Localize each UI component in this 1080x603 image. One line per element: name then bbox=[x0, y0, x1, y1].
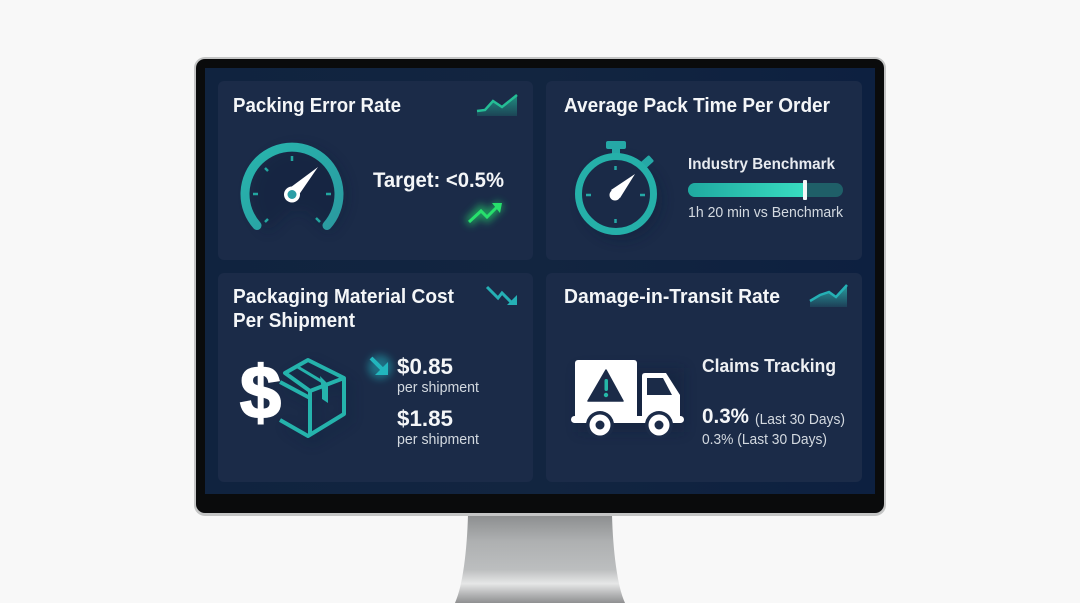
heading: packaging material cost: Packaging Material Cost bbox=[233, 286, 454, 308]
text: claims tracking: Claims Tracking bbox=[702, 355, 836, 376]
panel: packaging material cost: per shipment bbox=[397, 431, 480, 448]
monitor stand bbox=[455, 515, 625, 603]
gauge needle bbox=[284, 167, 318, 202]
panel: packaging material cost bbox=[218, 273, 533, 482]
icon: delivery truck with warning bbox=[571, 360, 684, 439]
package box bbox=[280, 360, 344, 436]
text: price one: $0.85 bbox=[397, 354, 453, 379]
heading: damage in transit: Damage-in-Transit Rate bbox=[564, 286, 780, 308]
text: time vs benchmark: 1h 20 min vs Benchmark bbox=[688, 204, 843, 221]
monitor frame bbox=[194, 57, 886, 516]
icon: down trend bbox=[487, 287, 517, 305]
panel: packaging material cost: Per Shipment bbox=[233, 310, 355, 332]
panel: packing error rate bbox=[218, 81, 533, 260]
bar chart: benchmark progress bbox=[688, 180, 843, 200]
icon: stopwatch bbox=[578, 141, 662, 240]
icon: teal down arrow bbox=[368, 355, 392, 379]
warning triangle bbox=[588, 370, 623, 401]
panel: packaging material cost: per shipment bbox=[397, 379, 480, 396]
panel: damage in transit bbox=[546, 273, 862, 482]
text: claims value: 0.3% bbox=[702, 405, 749, 428]
icon: dollar and package bbox=[240, 351, 349, 442]
icon: area sparkline bbox=[810, 285, 847, 307]
heading: packing error rate: Packing Error Rate bbox=[233, 95, 401, 117]
gauge chart bbox=[245, 147, 346, 232]
panel: average pack time bbox=[546, 81, 862, 260]
icon: green up arrow bbox=[468, 203, 502, 223]
dollar sign: $ bbox=[240, 351, 281, 434]
text: claims secondary: 0.3% (Last 30 Days) bbox=[702, 431, 827, 448]
text: price two: $1.85 bbox=[397, 406, 453, 431]
icon: trend sparkline bbox=[477, 95, 517, 116]
heading: average pack time: Average Pack Time Per Order bbox=[564, 95, 830, 117]
panel: damage in transit: (Last 30 Days) bbox=[755, 411, 845, 428]
text: industry benchmark: Industry Benchmark bbox=[688, 156, 835, 173]
text: target: Target: <0.5% bbox=[373, 169, 504, 192]
